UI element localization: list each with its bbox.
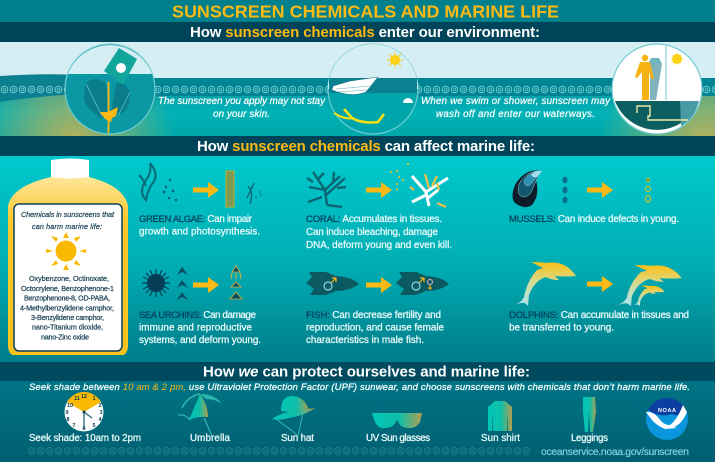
icon: clock: 8 <box>66 417 70 423</box>
coral: CORAL: Accumulates in tissues. <box>306 214 442 225</box>
green algae <box>139 163 262 238</box>
icon: clock: 11 <box>74 396 80 402</box>
sea urchins: systems, and deform young. <box>139 335 261 346</box>
icon: mussel and larvae <box>512 171 650 207</box>
sunscreen bottle: nano-Titanium dioxide, <box>32 322 103 332</box>
circle: swimmer and boat <box>328 44 418 134</box>
label: sunglasses: UV Sun glasses <box>366 433 430 444</box>
text: swim or shower: wash off and enter our waterways. <box>436 109 595 120</box>
sunscreen bottle: Chemicals in sunscreens that <box>21 210 115 219</box>
text: swim or shower <box>421 96 611 120</box>
logo: NOAA: NOAA <box>658 408 676 414</box>
heading band: protect <box>0 362 715 381</box>
sunscreen bottle <box>8 158 128 357</box>
coral: Can induce bleaching, damage <box>306 227 438 238</box>
heading band: affect marine life <box>0 136 715 156</box>
sunscreen bottle: can harm marine life: <box>32 222 102 231</box>
heading band: affect marine life: How sunscreen chemicals can affect marine life: <box>197 138 535 155</box>
icon: clock: 2 <box>98 403 102 409</box>
icon: sun hat <box>272 396 315 436</box>
icon: clock: 1 <box>92 396 96 402</box>
icon: sun <box>46 232 86 270</box>
icon: clock: 12 <box>81 394 87 400</box>
icon: clock: 4 <box>98 417 102 423</box>
icon: sun shirt <box>488 401 512 431</box>
advice sentence: Seek shade between 10 am & 2 pm, use Ultraviolet Protection Factor (UPF) sunwear, and choose sunscreens with chemicals that don’t harm marine life. <box>29 381 690 392</box>
text: apply: on your skin. <box>213 109 270 120</box>
coral <box>306 163 452 251</box>
fish: reproduction, and cause female <box>306 322 444 334</box>
icon: algae to stunted algae <box>139 163 262 207</box>
icon: clock <box>64 392 104 432</box>
sunscreen bottle: nano-Zinc oxide <box>41 332 89 342</box>
dolphins <box>509 262 689 334</box>
green algae: growth and photosynthesis. <box>139 226 260 238</box>
panel: protection <box>0 355 715 462</box>
label: umbrella: Umbrella <box>190 433 231 444</box>
fish: FISH: Can decrease fertility and <box>306 310 441 321</box>
icon: male fish to feminised fish <box>306 272 449 295</box>
decorative wave strip <box>28 446 531 456</box>
icon: leggings <box>583 397 596 432</box>
icon: clock: 10 <box>67 403 73 409</box>
icon: umbrella <box>178 394 222 436</box>
circle: shower <box>612 44 702 134</box>
icon: clock: 9 <box>65 410 69 416</box>
icon: clock: 5 <box>92 423 96 429</box>
sea urchins <box>139 266 261 346</box>
text: apply <box>158 96 326 120</box>
label: seek shade: Seek shade: 10am to 2pm <box>29 433 141 444</box>
icon: urchin to deformed larvae <box>142 266 242 300</box>
text: apply: The sunscreen you apply may not stay <box>158 96 326 107</box>
label: sun shirt: Sun shirt <box>481 433 520 444</box>
panel: marine life effects <box>0 156 715 357</box>
label: sun hat: Sun hat <box>281 433 314 444</box>
dolphins: be transferred to young. <box>509 322 614 334</box>
website url: oceanservice.noaa.gov/sunscreen <box>541 447 689 458</box>
sea urchins: immune and reproductive <box>139 322 252 334</box>
fish <box>306 272 449 346</box>
dolphins: DOLPHINS: Can accumulate in tissues and <box>509 310 689 321</box>
green algae: GREEN ALGAE: Can impair <box>139 214 253 225</box>
fish: characteristics in male fish. <box>306 335 424 346</box>
icon: healthy coral to bleached coral <box>307 163 448 207</box>
sunscreen bottle: Octocrylene, Benzophenone-1 <box>21 284 114 293</box>
sunscreen bottle: 3-Benzylidene camphor, <box>31 313 104 322</box>
sunscreen bottle: Oxybenzone, Octinoxate, <box>29 274 109 283</box>
circle: sunscreen on hands <box>65 44 155 134</box>
icon: sunglasses <box>372 413 422 428</box>
mussels <box>509 171 679 225</box>
heading band: enter environment <box>0 22 715 42</box>
icon: clock: 7 <box>72 423 76 429</box>
heading band: enter environment: How sunscreen chemicals enter our environment: <box>190 24 540 41</box>
icon: clock: 6 <box>82 426 86 432</box>
coral: DNA, deform young and even kill. <box>306 240 452 251</box>
icon: clock: 3 <box>99 410 103 416</box>
mussels: MUSSELS: Can induce defects in young. <box>509 214 679 225</box>
sunscreen bottle: Benzophenone-8, OD-PABA, <box>24 294 110 302</box>
text: swim or shower: When we swim or shower, sunscreen may <box>421 96 611 107</box>
heading band: protect: How we can protect ourselves and marine life: <box>203 364 530 380</box>
logo: NOAA <box>646 398 688 440</box>
label: leggings: Leggings <box>571 433 608 444</box>
sunscreen bottle: 4-Methylbenzylidene camphor, <box>20 304 114 312</box>
panel: how chemicals enter the environment <box>0 42 715 136</box>
title: SUNSCREEN CHEMICALS AND MARINE LIFE <box>172 2 559 22</box>
icon: dolphins <box>514 262 682 306</box>
sea urchins: SEA URCHINS: Can damage <box>139 310 256 321</box>
